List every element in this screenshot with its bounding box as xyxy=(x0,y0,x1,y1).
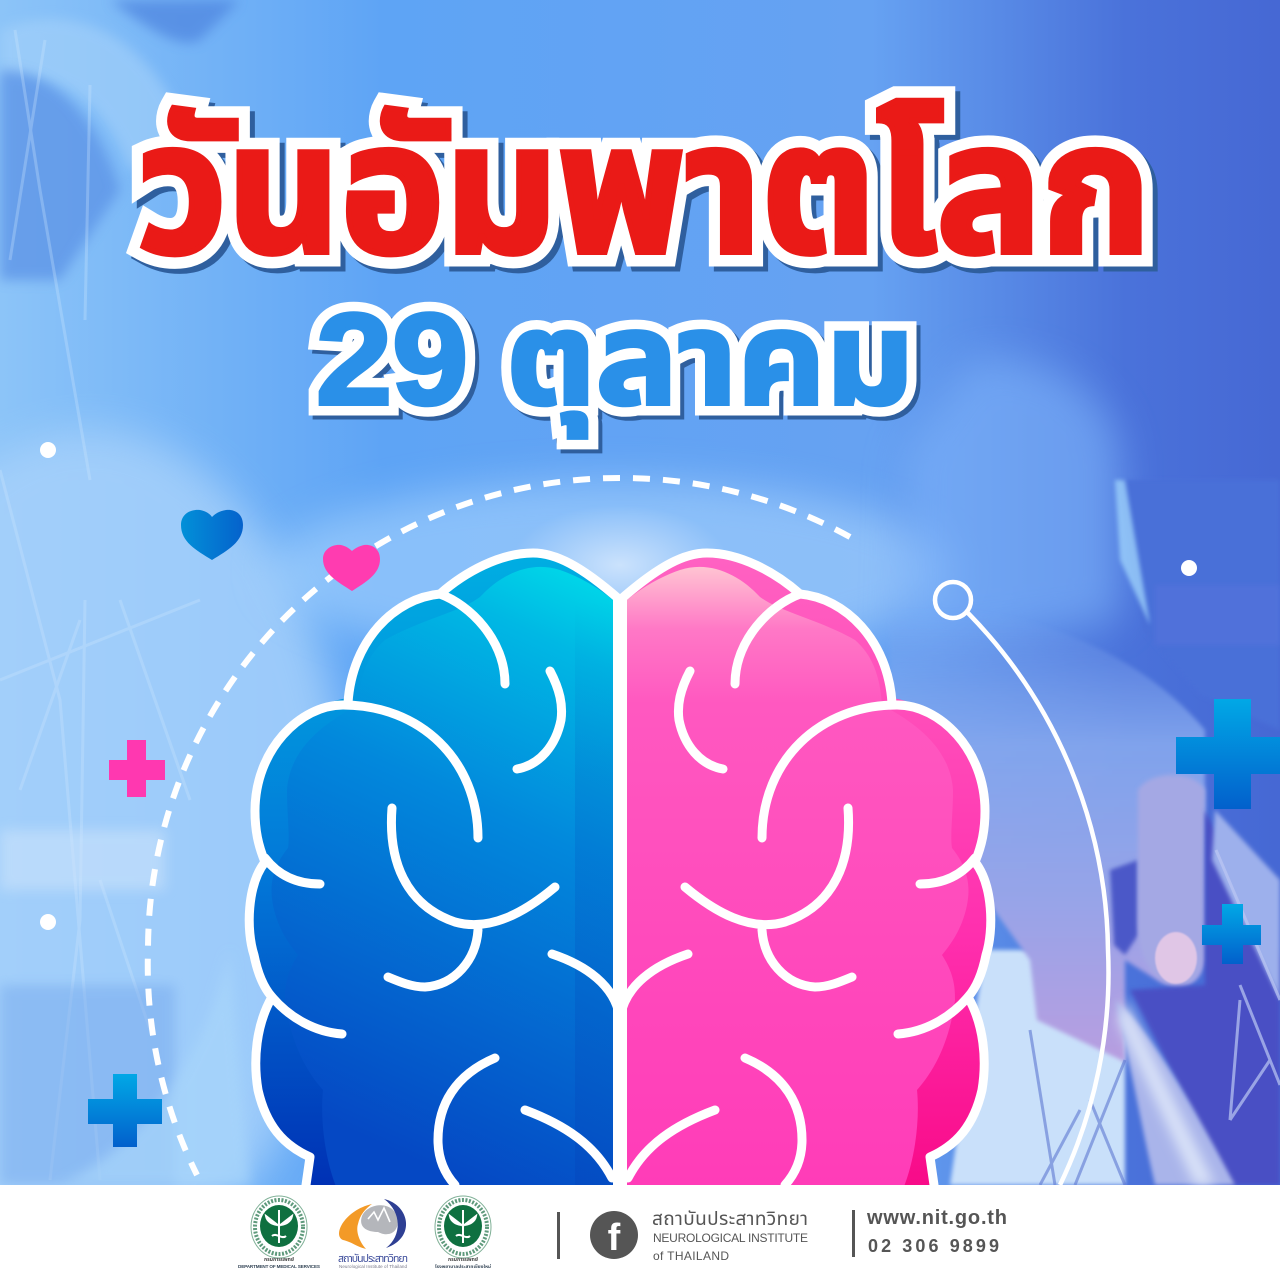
icon: facebook: f xyxy=(608,1217,621,1259)
divider xyxy=(557,1212,560,1259)
organisation name: NEUROLOGICAL INSTITUTE xyxy=(653,1231,808,1245)
logo: ministry of public health xyxy=(435,1196,491,1269)
organisation name: of THAILAND xyxy=(653,1249,729,1263)
contact details: www.nit.go.th xyxy=(866,1207,1007,1229)
logo: ministry of public health: กรมการแพทย์ xyxy=(448,1257,478,1263)
wheelchair rim lower right xyxy=(1130,810,1280,1185)
contact details: 02 306 9899 xyxy=(868,1236,999,1256)
dashed arc xyxy=(148,478,850,1175)
logo: department of medical services xyxy=(238,1196,320,1269)
brain white outlines xyxy=(249,553,991,1185)
icon: facebook xyxy=(590,1211,638,1259)
hand xyxy=(890,608,1205,1062)
title: วันอัมพาตโลก xyxy=(137,87,1151,291)
decorative dots xyxy=(40,442,1197,930)
footer band xyxy=(0,1185,1280,1280)
organisation name xyxy=(652,1209,808,1263)
logo: department of medical services: กรมการแพทย์ xyxy=(264,1257,294,1263)
icon: blue cross bottom-left xyxy=(88,1074,162,1147)
subtitle date: 29 ตุลาคม xyxy=(316,286,914,438)
subtitle date: 29 ตุลาคม xyxy=(320,290,918,442)
divider xyxy=(852,1210,855,1257)
logo: department of medical services: DEPARTMENT OF MEDICAL SERVICES xyxy=(238,1264,320,1269)
logo: neurological institute xyxy=(338,1199,408,1269)
contact details xyxy=(866,1207,1007,1256)
logo: neurological institute: Neurological Institute of Thailand xyxy=(339,1264,407,1269)
brain xyxy=(249,553,991,1189)
thin arc with ring xyxy=(935,582,1109,1185)
left hemisphere xyxy=(251,555,613,1189)
subtitle date: 29 ตุลาคม xyxy=(316,286,914,438)
right hemisphere xyxy=(627,555,989,1189)
logo: ministry of public health: โรงพยาบาลประสาทเชียงใหม่ xyxy=(435,1262,491,1269)
icon: pink heart xyxy=(323,545,380,591)
icon: pink cross xyxy=(109,740,165,797)
title: วันอัมพาตโลก xyxy=(137,87,1151,291)
title: วันอัมพาตโลก xyxy=(142,92,1156,296)
organisation name: สถาบันประสาทวิทยา xyxy=(652,1209,808,1230)
icon: blue heart xyxy=(181,510,243,560)
lower white area behind spokes xyxy=(950,950,1125,1185)
icon: small blue cross right xyxy=(1202,904,1261,964)
logo: neurological institute: สถาบันประสาทวิทยา xyxy=(338,1253,408,1265)
left spokes xyxy=(0,30,200,1180)
icon: large blue cross right xyxy=(1176,699,1280,809)
glow behind brain xyxy=(510,505,730,625)
